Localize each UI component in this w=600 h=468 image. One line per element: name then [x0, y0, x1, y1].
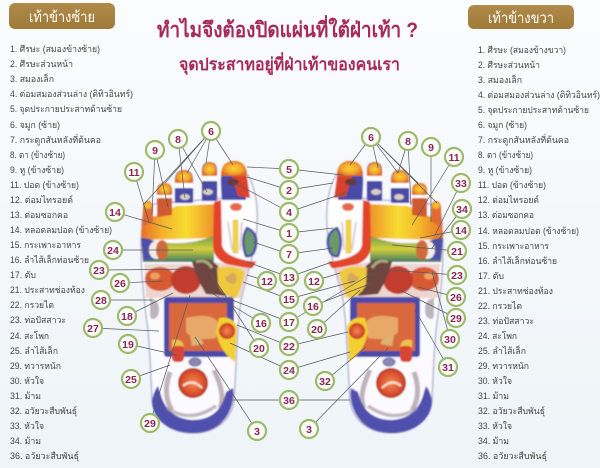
right foot list: 32. อวัยวะสืบพันธุ์ [478, 405, 545, 417]
left foot list: 17. ตับ [10, 270, 36, 280]
badge 14 right [452, 221, 470, 239]
badge 21 right: 21 [451, 246, 463, 258]
right foot list: 17. ตับ [478, 271, 504, 281]
right foot list: 8. ตา (ข้างซ้าย) [478, 150, 533, 160]
badge 13 centre: 13 [283, 272, 295, 284]
badge 19 left [119, 335, 137, 353]
left foot list: 24. สะโพก [10, 331, 49, 341]
badge 16 right: 16 [307, 301, 319, 313]
badge 5 centre: 5 [286, 164, 292, 176]
right foot list: 3. สมองเล็ก [478, 73, 522, 85]
badge 12 left [258, 272, 276, 290]
badge 30 right [441, 330, 459, 348]
left foot list: 33. หัวใจ [10, 421, 44, 431]
badge 24 centre [280, 361, 298, 379]
badge 15 centre [280, 290, 298, 308]
right foot list: 33. หัวใจ [478, 421, 512, 431]
badge 26 right [447, 288, 465, 306]
badge 17 centre [280, 313, 298, 331]
badge 16 left [252, 314, 270, 332]
badge 26 left [111, 274, 129, 292]
leader lines: left foot [93, 131, 289, 431]
badge 24 left: 24 [107, 245, 119, 257]
badge 15 centre: 15 [283, 294, 295, 306]
right foot list: 9. หู (ข้างซ้าย) [478, 165, 532, 176]
left foot list: 22. กรวยไต [10, 300, 54, 310]
left foot list: 13. ต่อมซอกคอ [10, 210, 68, 220]
left foot reflexology map [141, 161, 257, 433]
badge 14 right: 14 [455, 225, 467, 237]
badge 11 left: 11 [128, 167, 140, 179]
left foot list: 36. อวัยวะสืบพันธุ์ [10, 450, 79, 462]
badge 18 left [118, 307, 136, 325]
left foot list: 2. ศีรษะส่วนหน้า [10, 59, 73, 69]
subtitle: จุดประสาทอยู่ที่ฝ่าเท้าของคนเรา [179, 52, 400, 76]
badge 29 left [141, 414, 159, 432]
badge 9 right [422, 138, 440, 156]
badge 4 centre [280, 203, 298, 221]
badge 34 right: 34 [456, 204, 468, 216]
badge 36 centre [280, 391, 298, 409]
right foot list [478, 45, 600, 462]
badge 20 right: 20 [311, 324, 323, 336]
left foot list: 1. ศีรษะ (สมองข้างซ้าย) [10, 44, 100, 54]
badge 3 left: 3 [254, 426, 260, 438]
right foot list: 14. หลอดลมปอด (ข้างซ้าย) [478, 226, 579, 236]
badge 29 right [447, 309, 465, 327]
badge 12 right: 12 [308, 276, 320, 288]
badge 31 right [439, 358, 457, 376]
badge 3 right [300, 420, 318, 438]
left foot list: 3. สมองเล็ก [10, 72, 54, 84]
badge 9 left [146, 141, 164, 159]
left foot list: 5. จุดประกายประสาทด้านซ้าย [10, 104, 122, 115]
left foot list: 11. ปอด (ข้างซ้าย) [10, 180, 79, 190]
right foot list: 7. กระดูกสันหลังที่ต้นคอ [478, 133, 569, 146]
badge 26 left: 26 [114, 278, 126, 290]
badge 14 left: 14 [109, 207, 121, 219]
left foot list: 14. หลอดลมปอด (ข้างซ้าย) [10, 225, 112, 235]
right foot list: 11. ปอด (ข้างซ้าย) [478, 180, 546, 190]
badge 21 right [448, 242, 466, 260]
left foot list: 34. ม้าม [10, 436, 41, 446]
right foot list: 13. ต่อมซอกคอ [478, 210, 534, 220]
badge 29 left: 29 [144, 418, 156, 430]
right foot list: 15. กระเพาะอาหาร [478, 241, 549, 251]
right foot list: 21. ประสาทช่องท้อง [478, 286, 553, 296]
right foot list: 25. ลำไส้เล็ก [478, 344, 526, 356]
badge 27 left: 27 [87, 323, 99, 335]
left foot list: 23. ท่อปัสสาวะ [10, 315, 66, 325]
leader lines: right foot [289, 137, 462, 429]
badge 7 centre [280, 245, 298, 263]
left foot list: 12. ต่อมไทรอยด์ [10, 194, 73, 205]
badge 25 left [122, 370, 140, 388]
badge 36 centre: 36 [283, 395, 295, 407]
badge 16 right [304, 297, 322, 315]
badge 17 centre: 17 [283, 317, 295, 329]
right foot list: 30. หัวใจ [478, 376, 512, 386]
badge 8 right: 8 [405, 136, 411, 148]
left foot list: 7. กระดูกสันหลังที่ต้นคอ [10, 133, 101, 146]
right foot list: 29. ทวารหนัก [478, 361, 529, 371]
badge 16 left: 16 [255, 318, 267, 330]
badge 34 right [453, 200, 471, 218]
badge 6 left: 6 [208, 126, 214, 138]
badge 22 centre: 22 [283, 341, 295, 353]
left foot list: 8. ตา (ข้างซ้าย) [10, 150, 65, 160]
badge 14 left [106, 203, 124, 221]
right header: เท้าข้างขวา: เท้าข้างขวา [488, 10, 554, 27]
right foot reflexology map [327, 161, 443, 433]
badge 28 left [92, 291, 110, 309]
badge 22 centre [280, 337, 298, 355]
badge 11 left [125, 163, 143, 181]
badge 29 right: 29 [450, 313, 462, 325]
left foot list: 15. กระเพาะอาหาร [10, 240, 81, 250]
badge 13 centre [280, 268, 298, 286]
right foot list: 16. ลำไส้เล็กท่อนซ้าย [478, 254, 557, 266]
right foot list: 36. อวัยวะสืบพันธุ์ [478, 450, 547, 462]
badge 20 left [250, 339, 268, 357]
badge 31 right: 31 [442, 362, 454, 374]
badge 24 centre: 24 [283, 365, 295, 377]
badge 12 right [305, 272, 323, 290]
badge 12 left: 12 [261, 276, 273, 288]
badge 24 left [104, 241, 122, 259]
right foot list: 5. จุดประกายประสาทด้านซ้าย [478, 105, 589, 116]
badge 2 centre [280, 181, 298, 199]
badge 33 right: 33 [455, 178, 467, 190]
left header: เท้าข้างซ้าย [9, 3, 115, 29]
right foot list: 2. ศีรษะส่วนหน้า [478, 60, 540, 70]
badge 6 left [202, 122, 220, 140]
badge 23 right [448, 266, 466, 284]
badge 11 right: 11 [448, 152, 460, 164]
badge 4 centre: 4 [286, 207, 292, 219]
badge 1 centre [280, 224, 298, 242]
right foot list: 6. จมูก (ซ้าย) [478, 120, 527, 131]
badge 23 left: 23 [93, 265, 105, 277]
left foot list: 30. หัวใจ [10, 376, 44, 386]
title: ทำไมจึงต้องปิดแผ่นที่ใต้ฝ่าเท้า ? [157, 14, 418, 42]
badge 18 left: 18 [121, 311, 133, 323]
left foot list: 9. หู (ข้างซ้าย) [10, 165, 64, 176]
badge 23 right: 23 [451, 270, 463, 282]
badge 26 right: 26 [450, 292, 462, 304]
badge 28 left: 28 [95, 295, 107, 307]
right foot list: 22. กรวยไต [478, 301, 522, 311]
badge 25 left: 25 [125, 374, 137, 386]
left foot list: 31. ม้าม [10, 391, 41, 401]
badge 9 right: 9 [428, 142, 434, 154]
badge 3 right: 3 [306, 424, 312, 436]
right foot list: 31. ม้าม [478, 391, 509, 401]
badge 33 right [452, 174, 470, 192]
left foot list: 6. จมูก (ซ้าย) [10, 120, 60, 131]
badge 6 right: 6 [368, 132, 374, 144]
badge 32 right [316, 372, 334, 390]
badge 20 right [308, 320, 326, 338]
left foot list [10, 44, 133, 462]
badge 19 left: 19 [122, 339, 134, 351]
left foot list: 4. ต่อมสมองส่วนล่าง (ดิทิวอินทร์) [10, 88, 133, 99]
badge 2 centre: 2 [286, 185, 292, 197]
badge 32 right: 32 [319, 376, 331, 388]
badge 8 left: 8 [175, 134, 181, 146]
badge 11 right [445, 148, 463, 166]
badge 3 left [248, 422, 266, 440]
right foot list: 24. สะโพก [478, 331, 517, 341]
left foot list: 16. ลำไส้เล็กท่อนซ้าย [10, 253, 89, 265]
left foot list: 25. ลำไส้เล็ก [10, 344, 58, 356]
badge 6 right [362, 128, 380, 146]
right foot list: 12. ต่อมไทรอยด์ [478, 194, 539, 205]
left foot list: 21. ประสาทช่องท้อง [10, 285, 85, 295]
badge 1 centre: 1 [286, 228, 292, 240]
right header: เท้าข้างขวา [468, 5, 574, 29]
left foot list: 29. ทวารหนัก [10, 361, 61, 371]
badge 5 centre [280, 160, 298, 178]
badge 9 left: 9 [152, 145, 158, 157]
badge 23 left [90, 261, 108, 279]
badge 8 right [399, 132, 417, 150]
left foot list: 32. อวัยวะสืบพันธุ์ [10, 405, 77, 417]
right foot list: 23. ท่อปัสสาวะ [478, 316, 534, 326]
right foot list: 34. ม้าม [478, 436, 509, 446]
left header: เท้าข้างซ้าย: เท้าข้างซ้าย [29, 9, 95, 26]
right foot list: 1. ศีรษะ (สมองข้างขวา) [478, 45, 566, 55]
badge 7 centre: 7 [286, 249, 292, 261]
badge 20 left: 20 [253, 343, 265, 355]
badge 30 right: 30 [444, 334, 456, 346]
badge 8 left [169, 130, 187, 148]
badge 27 left [84, 319, 102, 337]
